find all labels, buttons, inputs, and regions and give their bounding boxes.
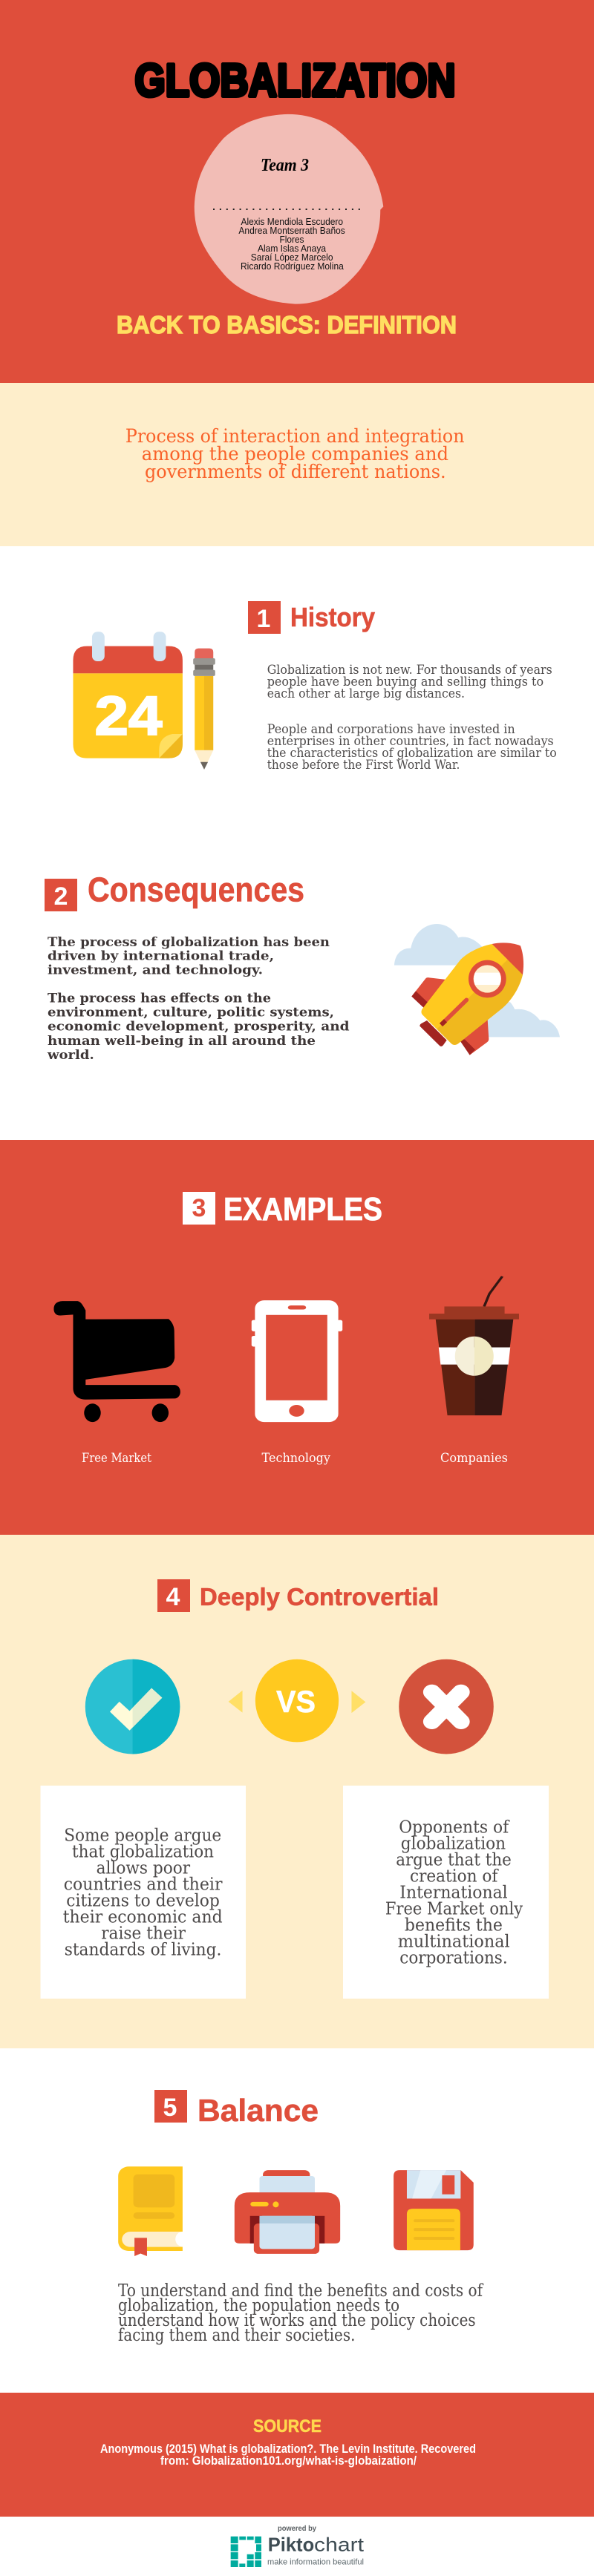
argument against text: Opponents of — [399, 1818, 510, 1837]
balance text: facing them and their societies. — [118, 2326, 355, 2345]
team members: Alexis Mendiola Escudero — [241, 217, 343, 227]
piktochart wordmark — [267, 2534, 365, 2567]
argument against text — [385, 1818, 523, 1967]
icon: floppy disk — [394, 2170, 474, 2250]
number badge 5: 5 — [163, 2094, 177, 2122]
argument for text: their economic and — [63, 1907, 223, 1927]
argument for text: that globalization — [72, 1842, 214, 1861]
team members: Ricardo Rodríguez Molina — [241, 261, 344, 272]
argument against text: creation of — [410, 1867, 499, 1886]
consequences paragraph 2: environment, culture, politic systems, — [48, 1006, 334, 1020]
history heading: History — [290, 602, 375, 632]
controvertial heading: Deeply Controvertial — [200, 1583, 439, 1610]
number badge 1 — [248, 601, 281, 634]
icon: vs badge — [229, 1659, 365, 1742]
panel: consequences — [0, 843, 594, 1140]
argument against text: corporations. — [399, 1948, 508, 1967]
argument against text: International — [399, 1883, 508, 1902]
argument against text: argue that the — [396, 1850, 512, 1869]
number badge 3 — [183, 1192, 215, 1225]
source citation: from: Globalization101.org/what-is-globaization/ — [160, 2454, 417, 2468]
panel: piktochart footer — [0, 2517, 594, 2576]
icon: smartphone — [252, 1300, 342, 1422]
definition text: governments of different nations. — [145, 461, 446, 482]
panel: deeply controvertial — [0, 1535, 594, 2048]
number badge 4 — [157, 1579, 190, 1612]
title: GLOBALIZATION — [135, 55, 456, 107]
history paragraph 2: the characteristics of globalization are similar to — [267, 746, 557, 761]
argument for text: raise their — [101, 1924, 186, 1943]
history paragraph 1: Globalization is not new. For thousands of years — [267, 663, 552, 678]
number badge 3: 3 — [192, 1194, 206, 1222]
definition text: among the people companies and — [142, 443, 448, 465]
balance text — [118, 2281, 483, 2345]
argument for text: standards of living. — [65, 1940, 221, 1959]
icon: calendar — [73, 632, 183, 758]
team members — [238, 217, 345, 272]
number badge 2: 2 — [54, 882, 68, 911]
consequences paragraph 1: investment, and technology. — [48, 963, 263, 977]
argument for text: Some people argue — [64, 1826, 221, 1845]
history paragraph 1: each other at large big distances. — [267, 686, 465, 701]
panel: definition — [0, 383, 594, 546]
icon: printer — [235, 2170, 340, 2254]
team members: Saraí López Marcelo — [251, 252, 333, 263]
team name: Team 3 — [261, 156, 309, 175]
icon: calendar: 24 — [95, 685, 162, 747]
icon: piktochart logo — [231, 2537, 261, 2567]
argument for text — [63, 1826, 223, 1959]
argument against text: globalization — [401, 1834, 506, 1853]
argument for text: countries and their — [64, 1875, 223, 1894]
consequences paragraph 2: human well-being in all around the — [48, 1034, 316, 1049]
definition text — [125, 425, 465, 482]
icon: coffee cup — [429, 1276, 519, 1415]
consequences heading: Consequences — [88, 870, 304, 908]
history paragraph 2: People and corporations have invested in — [267, 722, 515, 737]
number badge 5 — [154, 2090, 187, 2123]
argument against text: Free Market only — [385, 1899, 523, 1918]
argument for text: allows poor — [97, 1858, 190, 1878]
subtitle: BACK TO BASICS: DEFINITION — [117, 311, 457, 338]
team badge — [195, 114, 383, 304]
panel: history — [0, 546, 594, 843]
source citation — [100, 2442, 476, 2468]
team members: Alam Islas Anaya — [258, 243, 326, 254]
icon: cross — [399, 1659, 494, 1754]
icon: shopping cart — [53, 1301, 180, 1422]
icon: check mark — [85, 1659, 180, 1754]
piktochart wordmark: make information beautiful — [267, 2558, 364, 2567]
consequences paragraph 2: The process has effects on the — [48, 992, 271, 1006]
balance text: globalization, the population needs to — [118, 2296, 399, 2316]
label: technology: Technology — [261, 1451, 330, 1466]
icon: book — [118, 2166, 190, 2256]
label: companies: Companies — [440, 1451, 508, 1466]
piktochart wordmark: Pikto — [268, 2534, 314, 2556]
consequences paragraph 2: world. — [47, 1048, 94, 1063]
panel: header — [0, 0, 594, 383]
powered by: powered by — [278, 2524, 316, 2533]
history paragraph 1 — [267, 663, 552, 701]
consequences paragraph 1 — [48, 935, 330, 977]
number badge 4: 4 — [166, 1583, 180, 1611]
definition text: Process of interaction and integration — [125, 425, 465, 447]
history paragraph 2: those before the First World War. — [267, 758, 460, 773]
consequences paragraph 2 — [47, 992, 350, 1063]
balance text: To understand and find the benefits and costs of — [118, 2281, 483, 2301]
consequences paragraph 2: economic development, prosperity, and — [48, 1020, 350, 1035]
history paragraph 1: people have been buying and selling things to — [267, 675, 544, 689]
balance heading: Balance — [198, 2093, 319, 2128]
argument against text: multinational — [398, 1932, 510, 1951]
number badge 1: 1 — [257, 605, 270, 633]
icon: rocket and clouds — [394, 924, 560, 1055]
history paragraph 2: enterprises in other countries, in fact nowadays — [267, 734, 554, 749]
team members: Andrea Montserrath Baños — [238, 226, 345, 236]
source heading: SOURCE — [253, 2416, 322, 2436]
panel: argument against — [343, 1786, 549, 1999]
panel: examples — [0, 1140, 594, 1535]
history paragraph 2 — [267, 722, 557, 773]
label: free market: Free Market — [82, 1451, 151, 1466]
consequences paragraph 1: driven by international trade, — [48, 949, 274, 964]
team members: Flores — [279, 235, 304, 245]
examples heading: EXAMPLES — [223, 1191, 382, 1228]
argument against text: benefits the — [405, 1915, 503, 1935]
piktochart wordmark: chart — [314, 2534, 365, 2556]
icon: pencil — [193, 649, 215, 770]
consequences paragraph 1: The process of globalization has been — [48, 935, 330, 950]
source citation: Anonymous (2015) What is globalization?. The Levin Institute. Recovered — [100, 2442, 476, 2456]
argument for text: citizens to develop — [66, 1891, 220, 1910]
panel: argument for — [40, 1786, 246, 1999]
panel: balance — [0, 2048, 594, 2393]
vs label: VS — [276, 1684, 316, 1719]
panel: source — [0, 2393, 594, 2517]
balance text: understand how it works and the policy choices — [118, 2311, 476, 2330]
number badge 2 — [45, 879, 77, 911]
